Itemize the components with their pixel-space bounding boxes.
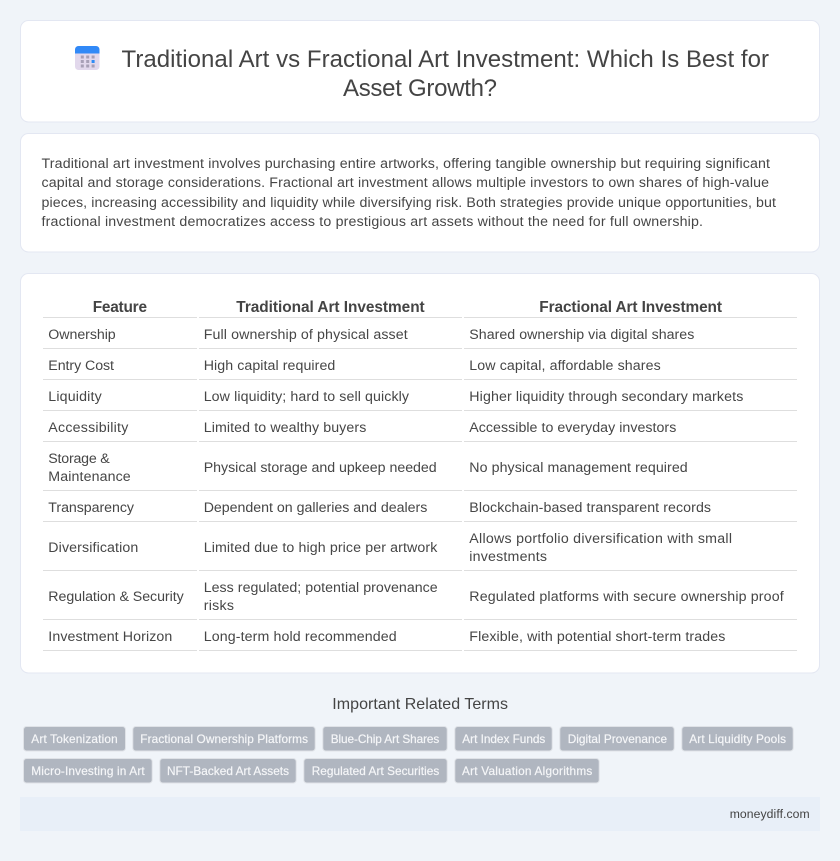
tag: art valuation algorithms: Art Valuation Algorithms xyxy=(462,764,592,778)
tag: regulated art securities: Regulated Art Securities xyxy=(312,764,439,778)
tag: digital provenance: Digital Provenance xyxy=(568,732,667,746)
row: transparency: Dependent on galleries and dealers xyxy=(204,500,427,516)
row: transparency: Transparency xyxy=(48,500,135,516)
tag: micro-investing in art: Micro-Investing in Art xyxy=(31,764,145,778)
row: entry cost: Low capital, affordable shares xyxy=(469,358,661,374)
row: entry cost xyxy=(48,358,661,374)
row: investment horizon: Flexible, with potential short-term trades xyxy=(469,629,725,645)
row: accessibility xyxy=(48,420,676,436)
row: regulation and security: Less regulated; potential provenance xyxy=(204,580,438,596)
tag: art tokenization: Art Tokenization xyxy=(31,732,118,746)
row: ownership xyxy=(48,327,694,343)
tag: regulated art securities xyxy=(304,758,447,783)
row: liquidity: Liquidity xyxy=(48,389,103,405)
text block: introduction paragraph: pieces, increasing accessibility and liquidity while diversifying risk. Both strategies provide unique opportunities, but xyxy=(42,195,776,211)
text block: introduction paragraph: capital and storage considerations. Fractional art investment allows multiple investors to own shares of high-value xyxy=(42,175,769,191)
icon: calendar xyxy=(75,46,100,70)
row: ownership: Shared ownership via digital shares xyxy=(469,327,694,343)
tag: nft-backed art assets xyxy=(160,758,296,783)
heading: important related terms: Important Related Terms xyxy=(332,696,508,713)
row: accessibility: Limited to wealthy buyers xyxy=(204,420,366,436)
text block: introduction paragraph: fractional investment democratizes access to prestigious art assets without the need for full ownership. xyxy=(42,214,703,230)
panel: comparison table xyxy=(20,274,820,673)
tag: art tokenization xyxy=(24,726,126,751)
row: transparency: Blockchain-based transparent records xyxy=(469,500,711,516)
row: regulation and security: Regulation & Security xyxy=(48,589,185,605)
tag: art index funds: Art Index Funds xyxy=(462,732,545,746)
row: regulation and security xyxy=(48,580,784,614)
row: regulation and security: Regulated platforms with secure ownership proof xyxy=(469,589,784,605)
footer: moneydiff.com xyxy=(730,807,810,821)
row: diversification: Allows portfolio diversification with small xyxy=(469,531,732,547)
tag: fractional ownership platforms: Fractional Ownership Platforms xyxy=(140,732,308,746)
tag: blue-chip art shares xyxy=(323,726,447,751)
panel: introduction xyxy=(20,134,820,252)
tag: art index funds xyxy=(455,726,552,751)
title xyxy=(122,46,769,102)
tag: fractional ownership platforms xyxy=(133,726,315,751)
text block: introduction paragraph xyxy=(42,156,776,230)
row: diversification xyxy=(48,531,732,565)
row: entry cost: High capital required xyxy=(204,358,335,374)
table header row: Fractional Art Investment xyxy=(539,299,722,316)
text block: introduction paragraph: Traditional art investment involves purchasing entire artworks, offering tangible ownership but requiring significant xyxy=(42,156,770,172)
tag: art liquidity pools xyxy=(682,726,793,751)
row: storage and maintenance: Storage & xyxy=(48,451,110,467)
row: ownership: Ownership xyxy=(48,327,116,343)
row: investment horizon xyxy=(48,629,725,645)
row: investment horizon: Investment Horizon xyxy=(48,629,172,645)
title: Traditional Art vs Fractional Art Investment: Which Is Best for xyxy=(122,46,769,73)
row: investment horizon: Long-term hold recommended xyxy=(204,629,397,645)
tag: nft-backed art assets: NFT-Backed Art Assets xyxy=(167,764,289,778)
row: storage and maintenance: No physical management required xyxy=(469,460,688,476)
table header row: Traditional Art Investment xyxy=(236,299,425,316)
table header row xyxy=(93,299,722,316)
row: storage and maintenance xyxy=(48,451,688,485)
row: diversification: Diversification xyxy=(48,540,138,556)
title: Asset Growth? xyxy=(343,75,497,102)
tag: digital provenance xyxy=(560,726,674,751)
row: accessibility: Accessible to everyday investors xyxy=(469,420,676,436)
row: diversification: investments xyxy=(469,549,547,565)
tag: micro-investing in art xyxy=(24,758,152,783)
panel: header xyxy=(20,20,820,122)
row: liquidity: Higher liquidity through secondary markets xyxy=(469,389,743,405)
row: ownership: Full ownership of physical asset xyxy=(204,327,408,343)
tag: art liquidity pools: Art Liquidity Pools xyxy=(689,732,786,746)
row: diversification: Limited due to high price per artwork xyxy=(204,540,438,556)
row: storage and maintenance: Physical storage and upkeep needed xyxy=(204,460,437,476)
tag list: related terms xyxy=(24,726,793,783)
row: storage and maintenance: Maintenance xyxy=(48,469,131,485)
tag: art valuation algorithms xyxy=(455,758,599,783)
footer xyxy=(20,797,820,831)
tag: blue-chip art shares: Blue-Chip Art Shares xyxy=(331,732,439,746)
row: regulation and security: risks xyxy=(204,598,234,614)
row: entry cost: Entry Cost xyxy=(48,358,114,374)
row: liquidity xyxy=(48,389,743,405)
table header row: Feature xyxy=(93,299,147,316)
row: liquidity: Low liquidity; hard to sell quickly xyxy=(204,389,410,405)
row: accessibility: Accessibility xyxy=(48,420,129,436)
row: transparency xyxy=(48,500,711,516)
